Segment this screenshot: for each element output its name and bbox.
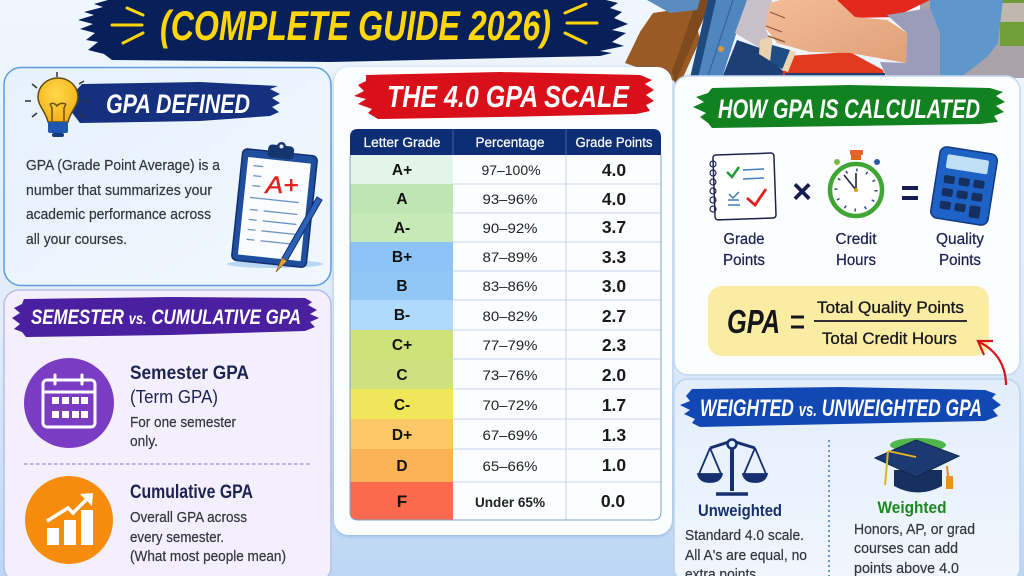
table letter grades: C: [396, 367, 408, 384]
arrow: red pointer to formula: [978, 341, 1006, 385]
text: weighted: [854, 498, 975, 576]
table grade points: 4.0: [602, 160, 626, 180]
labels: formula terms: Grade: [724, 231, 764, 248]
labels: formula terms: Credit: [836, 231, 877, 248]
text: cumulative GPA: every semester.: [130, 530, 224, 546]
table letter grades: [392, 162, 412, 511]
table percentages: 67–69%: [482, 427, 538, 443]
panel: weighted vs unweighted GPA: [674, 379, 1020, 576]
table letter grades: D: [396, 458, 408, 475]
table grade points: 3.3: [602, 247, 626, 267]
table percentages: 73–76%: [482, 367, 538, 383]
panel: semester vs cumulative GPA: [4, 290, 331, 576]
title banner: [78, 0, 628, 62]
table grade points: 1.3: [602, 425, 626, 445]
text: semester GPA: [130, 363, 249, 450]
table grade points: 2.7: [602, 306, 626, 326]
text: GPA definition: [26, 158, 221, 248]
text: weighted: courses can add: [854, 541, 958, 557]
icon: light bulb: [25, 72, 89, 137]
photo: student holding books: [625, 0, 1024, 84]
title accent rays: [112, 4, 597, 43]
table: GPA scale: [350, 129, 661, 520]
text: semester GPA: (Term GPA): [130, 387, 218, 407]
table letter grades: F: [397, 492, 407, 511]
text: unweighted: Standard 4.0 scale.: [685, 528, 804, 544]
labels: formula terms: Points: [939, 252, 981, 269]
icon: grade notebook: [710, 153, 776, 220]
table percentages: 87–89%: [482, 249, 538, 265]
table grade colour cells: [350, 155, 453, 520]
table letter grades: B-: [394, 307, 410, 324]
table letter grades: A: [396, 191, 408, 208]
table header: [364, 135, 653, 150]
heading banner: GPA defined: GPA DEFINED: [106, 89, 250, 119]
callout: GPA formula: [708, 286, 989, 356]
text: cumulative GPA: Overall GPA across: [130, 510, 247, 526]
text: semester GPA: For one semester: [130, 415, 236, 431]
table percentages: 97–100%: [482, 162, 540, 178]
heading banner: 4.0 GPA scale: [354, 72, 654, 119]
icon: equals sign: [902, 188, 918, 198]
table percentages: 77–79%: [482, 337, 538, 353]
heading banner: semester vs cumulative: SEMESTER vs. CUMULATIVE GPA: [31, 306, 301, 329]
table percentages: 80–82%: [482, 308, 538, 324]
heading banner: how GPA is calculated: [693, 85, 1005, 128]
table percentages: 93–96%: [482, 191, 538, 207]
table grade points: 4.0: [602, 189, 626, 209]
text: unweighted: [685, 501, 807, 576]
text: GPA definition: number that summarizes your: [26, 183, 212, 199]
icon: calculator: [930, 146, 998, 226]
table header: Letter Grade: [364, 135, 440, 150]
table grade points: 2.0: [602, 365, 626, 385]
icon: balance scale: [698, 440, 767, 494]
text: GPA definition: all your courses.: [26, 232, 127, 248]
icon: clipboard with A+ and pen: A+: [263, 172, 299, 199]
panel: GPA defined: [4, 68, 331, 286]
text: cumulative GPA: [130, 482, 286, 565]
text: semester GPA: only.: [130, 434, 158, 450]
table header: Percentage: [476, 135, 544, 150]
text: cumulative GPA: (What most people mean): [130, 549, 286, 565]
callout: GPA formula: GPA: [727, 303, 780, 340]
labels: formula terms: Hours: [836, 252, 876, 269]
icon: calendar: [24, 358, 114, 448]
table letter grades: C+: [392, 337, 412, 354]
callout: GPA formula: Total Credit Hours: [822, 329, 957, 348]
table letter grades: A-: [394, 220, 410, 237]
table percentages: 70–72%: [482, 397, 538, 413]
table percentages: Under 65%: [475, 494, 546, 510]
table grade points: 3.7: [602, 217, 626, 237]
table percentages: [475, 162, 546, 510]
table grade points: [601, 160, 626, 511]
table grade points: 1.0: [602, 455, 626, 475]
table percentages: 83–86%: [482, 278, 538, 294]
table grade points: 2.3: [602, 335, 626, 355]
icon: growth chart: [25, 476, 113, 564]
text: GPA definition: academic performance across: [26, 207, 211, 223]
table letter grades: B+: [392, 249, 412, 266]
table percentages: 90–92%: [482, 220, 538, 236]
text: unweighted: All A's are equal, no: [685, 548, 807, 564]
title text: (COMPLETE GUIDE 2026): [160, 2, 551, 49]
table letter grades: D+: [392, 427, 412, 444]
table header: Grade Points: [576, 135, 653, 150]
table grade points: 1.7: [602, 395, 626, 415]
table grade points: 0.0: [601, 491, 625, 511]
table grade points: 3.0: [602, 276, 626, 296]
icon: graduation cap: [875, 438, 959, 492]
text: GPA definition: GPA (Grade Point Average) is a: [26, 158, 221, 174]
labels: formula terms: Quality: [936, 231, 984, 248]
panel: how GPA is calculated: [674, 76, 1020, 375]
text: weighted: Honors, AP, or grad: [854, 522, 975, 538]
table letter grades: B: [396, 278, 408, 295]
panel: the 4.0 GPA scale: [334, 67, 672, 535]
labels: formula terms: [723, 231, 984, 269]
icon: stopwatch: [828, 150, 884, 218]
heading banner: weighted vs unweighted: [680, 387, 1001, 427]
heading banner: semester vs cumulative: [12, 297, 319, 337]
text: cumulative GPA: Cumulative GPA: [130, 482, 253, 503]
text: weighted: Weighted: [878, 498, 946, 517]
text: semester GPA: Semester GPA: [130, 363, 249, 384]
heading banner: 4.0 GPA scale: THE 4.0 GPA SCALE: [387, 79, 630, 114]
heading banner: GPA defined: [70, 82, 280, 123]
callout: GPA formula: Total Quality Points: [817, 298, 964, 317]
labels: formula terms: Points: [723, 252, 765, 269]
table letter grades: C-: [394, 397, 410, 414]
icon: clipboard with A+ and pen: [227, 138, 323, 272]
table letter grades: A+: [392, 162, 412, 179]
icon: multiply sign: ×: [792, 173, 812, 211]
text: unweighted: Unweighted: [698, 501, 782, 520]
table percentages: 65–66%: [482, 458, 538, 474]
